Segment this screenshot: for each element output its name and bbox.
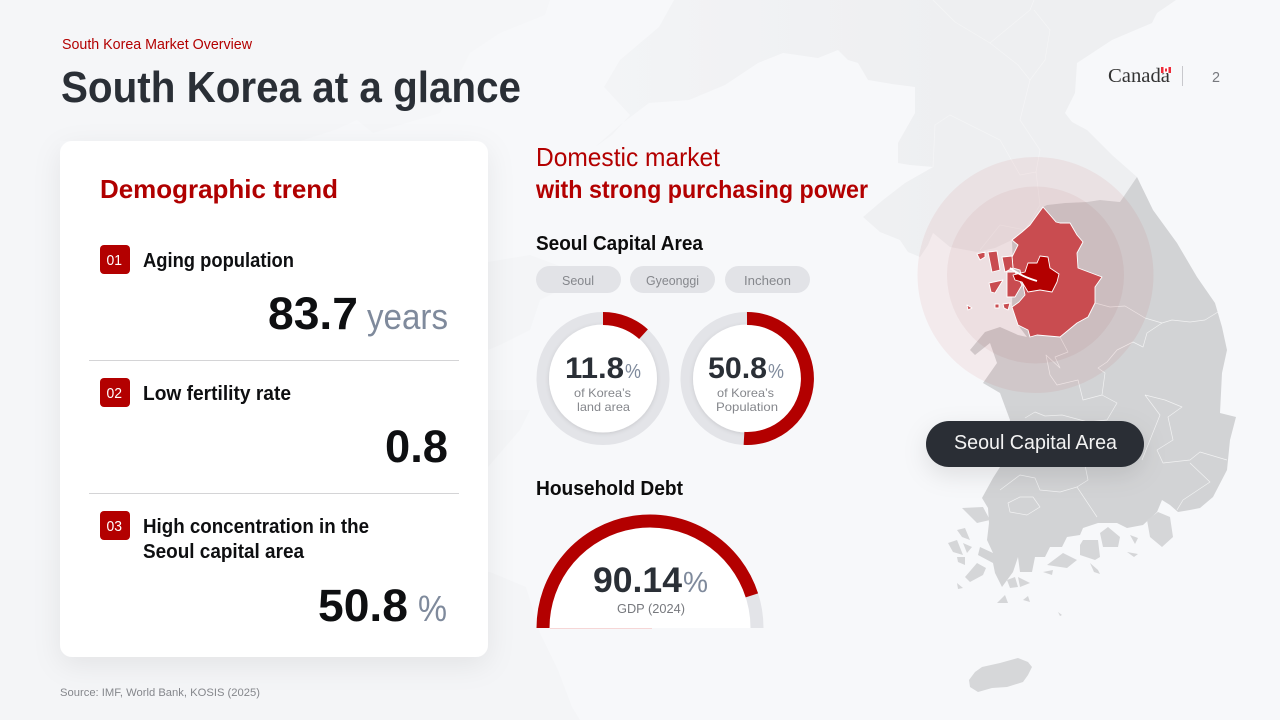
donut chart: land area 11.8%: of Korea’s — [574, 386, 631, 400]
item 01: aging population: 83.7 — [268, 288, 358, 339]
map: South Korea mainland — [970, 177, 1236, 587]
source note: Source: IMF, World Bank, KOSIS (2025) — [60, 687, 260, 699]
region: Incheon — [967, 251, 1022, 310]
map: China coast, lower left — [0, 560, 580, 720]
item 03: high concentration: 03 — [106, 518, 122, 535]
gauge chart: household debt 90.14% of GDP: % — [683, 567, 708, 599]
donut chart: population 50.8%: Population — [716, 400, 778, 414]
item 02: low fertility rate: Low fertility rate — [143, 383, 291, 405]
item 01: aging population: 01 — [106, 252, 122, 269]
item 01: aging population: Aging population — [143, 250, 294, 272]
section heading: domestic market — [535, 142, 868, 204]
map: Jeju island — [969, 658, 1032, 692]
map: provincial boundaries — [933, 0, 1227, 517]
gauge chart: household debt 90.14% of GDP: 90.14 — [593, 561, 683, 600]
title: South Korea at a glance — [61, 63, 521, 112]
tag: Seoul Capital Area: Seoul Capital Area — [954, 432, 1118, 454]
item 03: high concentration: Seoul capital area — [143, 541, 305, 563]
pill tags: regions: Seoul — [562, 273, 594, 288]
logo: Canada wordmark: Canada — [1108, 65, 1170, 87]
page number — [1182, 66, 1220, 86]
map: China coast, upper left — [0, 0, 550, 560]
han river — [1010, 268, 1037, 281]
subheading: Seoul Capital Area: Seoul Capital Area — [536, 233, 704, 255]
donut chart: population 50.8% — [687, 318, 807, 438]
item 03: high concentration: High concentration in the — [143, 516, 369, 538]
panel heading: Demographic trend — [100, 174, 338, 204]
item 02: low fertility rate: 0.8 — [385, 421, 448, 472]
gauge chart: household debt 90.14% of GDP: GDP (2024) — [617, 601, 685, 616]
subheading: Household Debt: Household Debt — [536, 478, 683, 500]
item 01: aging population — [100, 245, 448, 339]
section heading: domestic market: with strong purchasing power — [535, 176, 868, 204]
region: Gyeonggi — [1012, 207, 1102, 337]
panel: demographic trend — [60, 141, 488, 657]
item 03: high concentration: % — [418, 588, 447, 629]
pill tags: regions — [536, 266, 810, 293]
map: southwest and southern islands — [948, 507, 1173, 616]
tag: Seoul Capital Area — [926, 421, 1144, 467]
eyebrow heading: South Korea Market Overview — [62, 36, 252, 53]
donut chart: land area 11.8%: 11.8 — [565, 352, 624, 385]
item 01: aging population: years — [367, 296, 448, 337]
donut chart: land area 11.8%: land area — [577, 400, 630, 414]
item 02: low fertility rate — [100, 378, 448, 472]
seoul capital area highlight rings — [918, 157, 1154, 393]
donut chart: land area 11.8% — [543, 318, 663, 438]
map highlight: Seoul Capital Area — [967, 207, 1102, 337]
item 03: high concentration — [100, 511, 447, 631]
gauge chart: household debt 90.14% of GDP — [543, 521, 757, 629]
item 02: low fertility rate: 02 — [106, 385, 122, 402]
donut chart: population 50.8%: of Korea’s — [717, 386, 774, 400]
donut chart: land area 11.8%: % — [625, 361, 641, 383]
map: North Korea and Liaodong — [595, 0, 1176, 257]
page number: 2 — [1212, 69, 1220, 86]
donut chart: population 50.8%: % — [768, 361, 784, 383]
section heading: domestic market: Domestic market — [536, 142, 721, 172]
item 03: high concentration: 50.8 — [318, 580, 408, 631]
donut chart: population 50.8%: 50.8 — [708, 352, 767, 385]
region: Seoul — [1013, 256, 1059, 292]
pill tags: regions: Incheon — [744, 273, 791, 288]
map: Shandong peninsula — [488, 255, 572, 467]
pill tags: regions: Gyeonggi — [646, 273, 699, 288]
